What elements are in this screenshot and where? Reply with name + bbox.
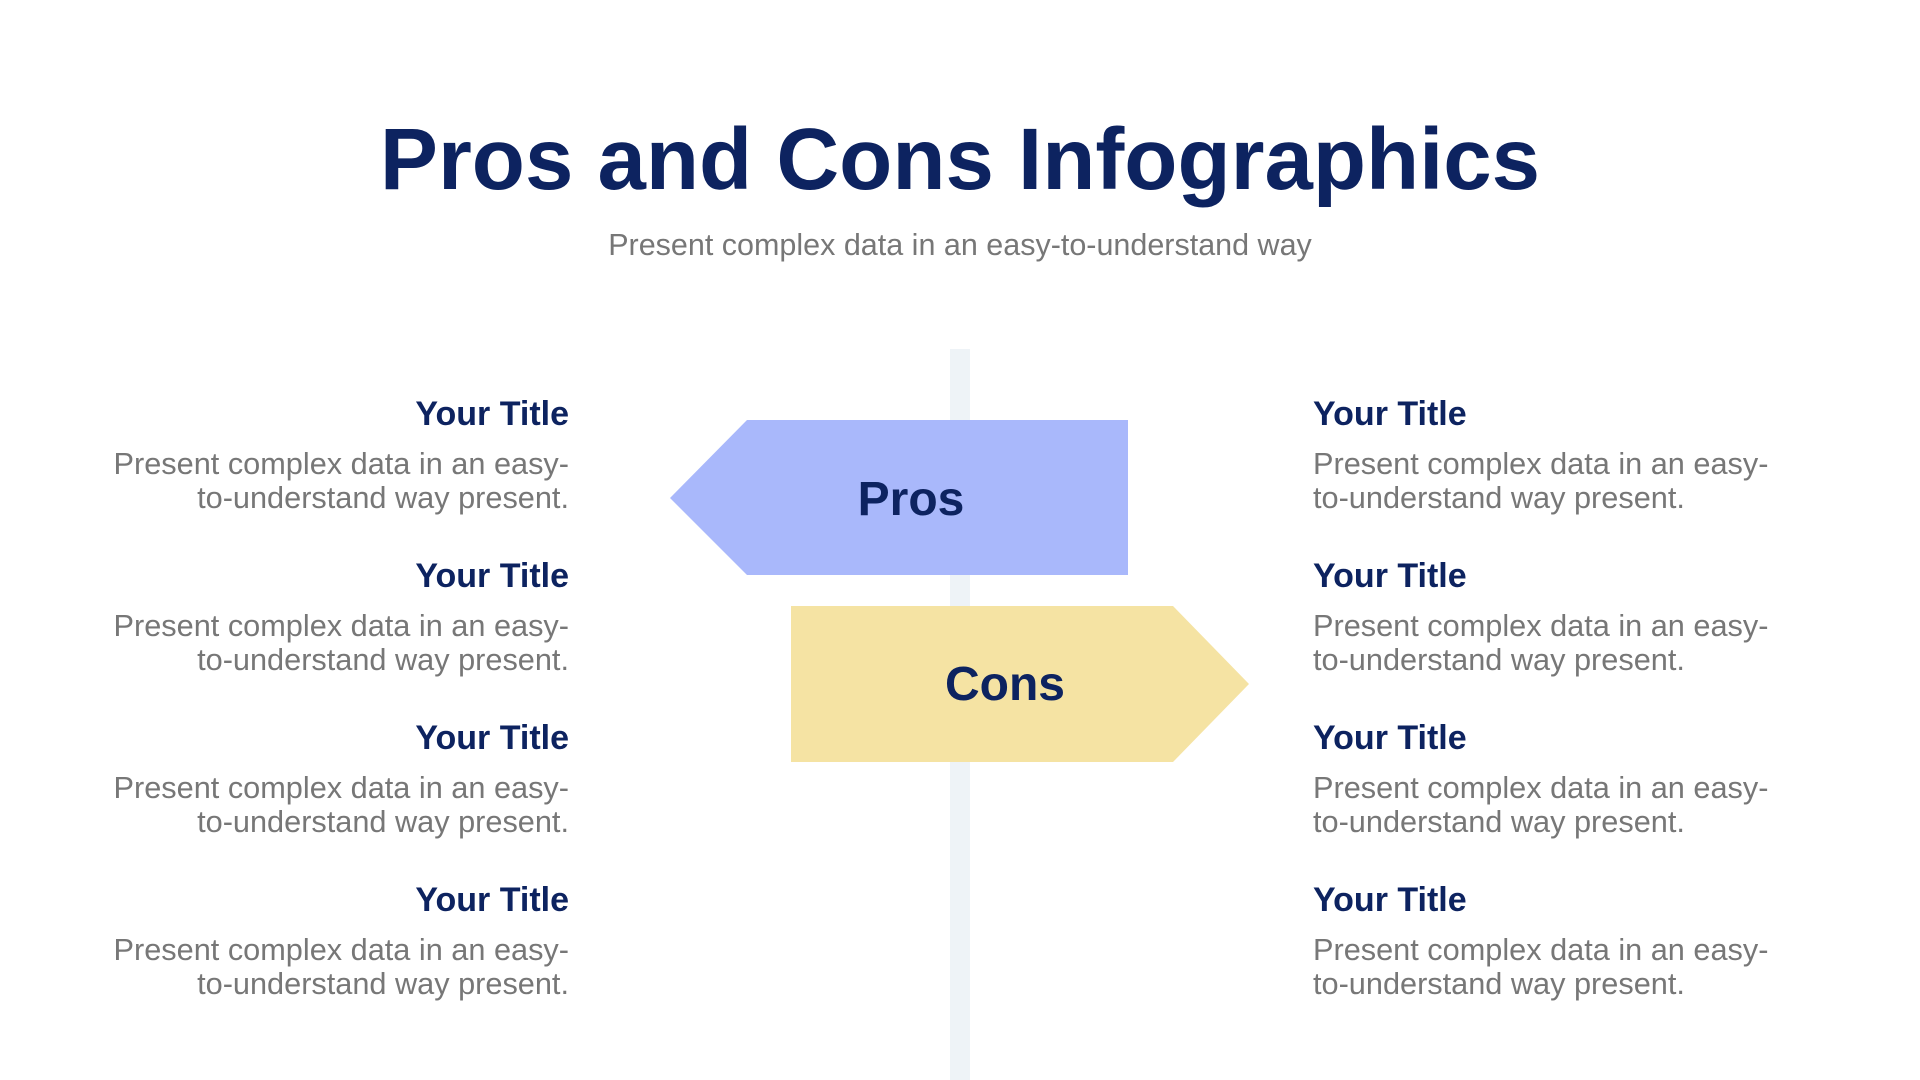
cons arrow (791, 606, 1249, 762)
pros item 2: to-understand way present. (197, 642, 569, 677)
pros arrow (670, 420, 1128, 575)
title: Pros and Cons Infographics (380, 111, 1540, 208)
cons item 4: to-understand way present. (1313, 966, 1685, 1001)
pros item 4 (114, 881, 569, 1001)
pros item 1 (114, 395, 569, 515)
cons item 4 (1313, 881, 1768, 1001)
pros item 3: Present complex data in an easy- (114, 770, 569, 805)
cons item 3: Present complex data in an easy- (1313, 770, 1768, 805)
cons item 2: to-understand way present. (1313, 642, 1685, 677)
pros item 1: to-understand way present. (197, 480, 569, 515)
pros item 3 (114, 719, 569, 839)
pros arrow: Pros (858, 473, 964, 526)
cons item 1: to-understand way present. (1313, 480, 1685, 515)
pros item 4: Your Title (415, 881, 569, 919)
cons item 3: to-understand way present. (1313, 804, 1685, 839)
cons item 2: Your Title (1313, 557, 1467, 595)
cons item 2: Present complex data in an easy- (1313, 608, 1768, 643)
cons item 3 (1313, 719, 1768, 839)
pros item 4: to-understand way present. (197, 966, 569, 1001)
cons item 1 (1313, 395, 1768, 515)
pros item 1: Your Title (415, 395, 569, 433)
pros item 2: Your Title (415, 557, 569, 595)
cons item 1: Your Title (1313, 395, 1467, 433)
pros item 2 (114, 557, 569, 677)
subtitle: Present complex data in an easy-to-understand way (608, 228, 1312, 262)
pros item 4: Present complex data in an easy- (114, 932, 569, 967)
pros item 3: to-understand way present. (197, 804, 569, 839)
pros item 2: Present complex data in an easy- (114, 608, 569, 643)
cons item 2 (1313, 557, 1768, 677)
center pole (950, 349, 970, 1080)
cons item 4: Present complex data in an easy- (1313, 932, 1768, 967)
cons arrow: Cons (945, 658, 1065, 711)
pros item 1: Present complex data in an easy- (114, 446, 569, 481)
cons item 1: Present complex data in an easy- (1313, 446, 1768, 481)
cons item 3: Your Title (1313, 719, 1467, 757)
cons item 4: Your Title (1313, 881, 1467, 919)
pros item 3: Your Title (415, 719, 569, 757)
